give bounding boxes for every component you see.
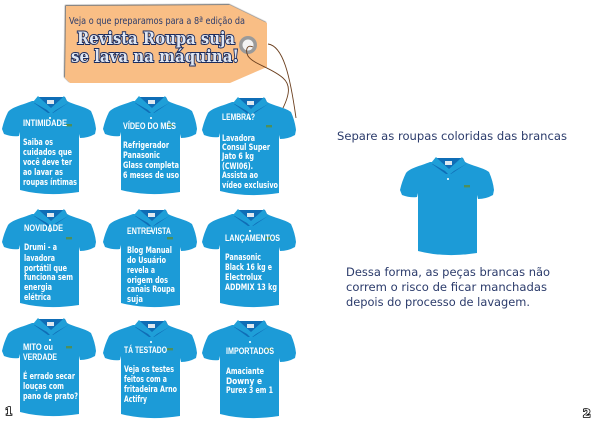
shirt card: VÍDEO DO MÊS: Panasonic: [123, 150, 160, 161]
shirt card: LANÇAMENTOS: ADDMIX 13 kg: [225, 282, 277, 293]
tag shape: [65, 5, 267, 83]
shirt card: MITO ou VERDADE: VERDADE: [23, 352, 57, 363]
shirt card: INTIMIDADE: roupas íntimas: [23, 177, 77, 188]
shirt card: VÍDEO DO MÊS: Refrigerador: [123, 140, 169, 151]
shirt card: INTIMIDADE: [2, 96, 96, 194]
shirt card: TÁ TESTADO: Actifry: [124, 394, 147, 405]
shirt card: NOVIDADE: lavadora: [24, 253, 55, 264]
shirt card: TÁ TESTADO: Veja os testes: [124, 364, 174, 375]
shirt card: NOVIDADE: NOVIDADE: [24, 223, 63, 234]
shirt card: NOVIDADE: portátil que: [24, 263, 67, 274]
shirt card: LANÇAMENTOS: Panasonic: [225, 252, 261, 263]
shirt card: ENTREVISTA: [103, 209, 197, 307]
tag title line 2: se lava na máquina!: [71, 47, 239, 67]
tag title line 1: Revista Roupa suja: [77, 29, 235, 49]
shirt card: TÁ TESTADO: feitos com a: [124, 374, 167, 385]
shirt card: ENTREVISTA: revela a: [127, 265, 155, 276]
shirt card: ENTREVISTA: ENTREVISTA: [127, 226, 171, 237]
shirt card: INTIMIDADE: cuidados que: [23, 147, 72, 158]
shirt card: VÍDEO DO MÊS: [103, 96, 197, 194]
shirt card: NOVIDADE: energia: [24, 282, 52, 293]
shirt card: IMPORTADOS: Purex 3 em 1: [226, 385, 273, 396]
tag intro text: Veja o que preparamos para a 8ª edição da: [69, 16, 245, 27]
shirt card: ENTREVISTA: suja: [127, 294, 143, 305]
shirt card: TÁ TESTADO: fritadeira Arno: [124, 384, 177, 395]
shirt card: IMPORTADOS: IMPORTADOS: [226, 346, 274, 357]
shirt card: VÍDEO DO MÊS: Glass completa: [123, 160, 179, 171]
shirt card: LANÇAMENTOS: LANÇAMENTOS: [225, 233, 280, 244]
icon: blue polo shirt: [400, 157, 494, 255]
shirt card: INTIMIDADE: você deve ter: [23, 157, 72, 168]
shirt card: ENTREVISTA: Blog Manual: [127, 245, 172, 256]
shirt card: LEMBRA?: LEMBRA?: [222, 112, 255, 123]
shirt card: ENTREVISTA: do Usuário: [127, 255, 166, 266]
shirt card: LEMBRA?: (CWI06).: [222, 161, 253, 172]
shirt card: NOVIDADE: elétrica: [24, 292, 51, 303]
shirt card: LANÇAMENTOS: [202, 209, 296, 307]
shirt card: MITO ou VERDADE: MITO ou: [23, 342, 53, 353]
page number 1: 1: [5, 405, 13, 418]
shirt card: LEMBRA?: Assista ao: [222, 170, 258, 181]
right page paragraph: [346, 265, 550, 309]
tag eyelet: [239, 36, 257, 54]
shirt card: INTIMIDADE: ao lavar as: [23, 167, 63, 178]
tag string: [247, 44, 296, 118]
shirt card: IMPORTADOS: Downy e: [226, 376, 262, 387]
shirt card: INTIMIDADE: Saiba os: [23, 137, 53, 148]
right page heading: Separe as roupas coloridas das brancas: [337, 129, 567, 143]
page number 2: 2: [583, 407, 591, 420]
shirt card: VÍDEO DO MÊS: 6 meses de uso: [123, 170, 179, 181]
shirt card: LEMBRA?: Jato 6 kg: [221, 151, 254, 162]
shirt card: MITO ou VERDADE: pano de prato?: [23, 391, 78, 402]
shirt card: LEMBRA?: Consul Super: [222, 142, 270, 153]
shirt card: NOVIDADE: funciona sem: [24, 272, 73, 283]
shirt card: ENTREVISTA: canais Roupa: [127, 284, 175, 295]
shirt card: LEMBRA?: [202, 97, 296, 195]
shirt card: NOVIDADE: Drumi - a: [24, 242, 57, 253]
shirt card: IMPORTADOS: Amaciante: [226, 366, 264, 377]
shirt card: IMPORTADOS: [202, 320, 296, 418]
shirt card: MITO ou VERDADE: É errado secar: [23, 370, 75, 382]
shirt card: LANÇAMENTOS: Electrolux: [225, 272, 262, 283]
shirt card: MITO ou VERDADE: louças com: [23, 381, 64, 392]
right page paragraph: depois do processo de lavagem.: [346, 295, 530, 309]
shirt card: TÁ TESTADO: TÁ TESTADO: [124, 344, 167, 356]
tag: magazine edition label: [65, 5, 296, 118]
shirt card: NOVIDADE: [2, 209, 96, 307]
shirt card: INTIMIDADE: INTIMIDADE: [23, 118, 67, 129]
shirt card: LEMBRA?: vídeo exclusivo: [222, 180, 278, 191]
shirt card: ENTREVISTA: origem dos: [127, 275, 168, 286]
shirt card: MITO ou VERDADE: [2, 318, 96, 416]
shirt card: VÍDEO DO MÊS: VÍDEO DO MÊS: [123, 120, 176, 132]
shirt card: LANÇAMENTOS: Black 16 kg e: [225, 262, 272, 273]
right page paragraph: Dessa forma, as peças brancas não: [346, 265, 550, 279]
right page paragraph: correm o risco de ficar manchadas: [346, 280, 547, 294]
shirt card: LEMBRA?: Lavadora: [222, 133, 255, 144]
shirt card: TÁ TESTADO: [103, 320, 197, 418]
